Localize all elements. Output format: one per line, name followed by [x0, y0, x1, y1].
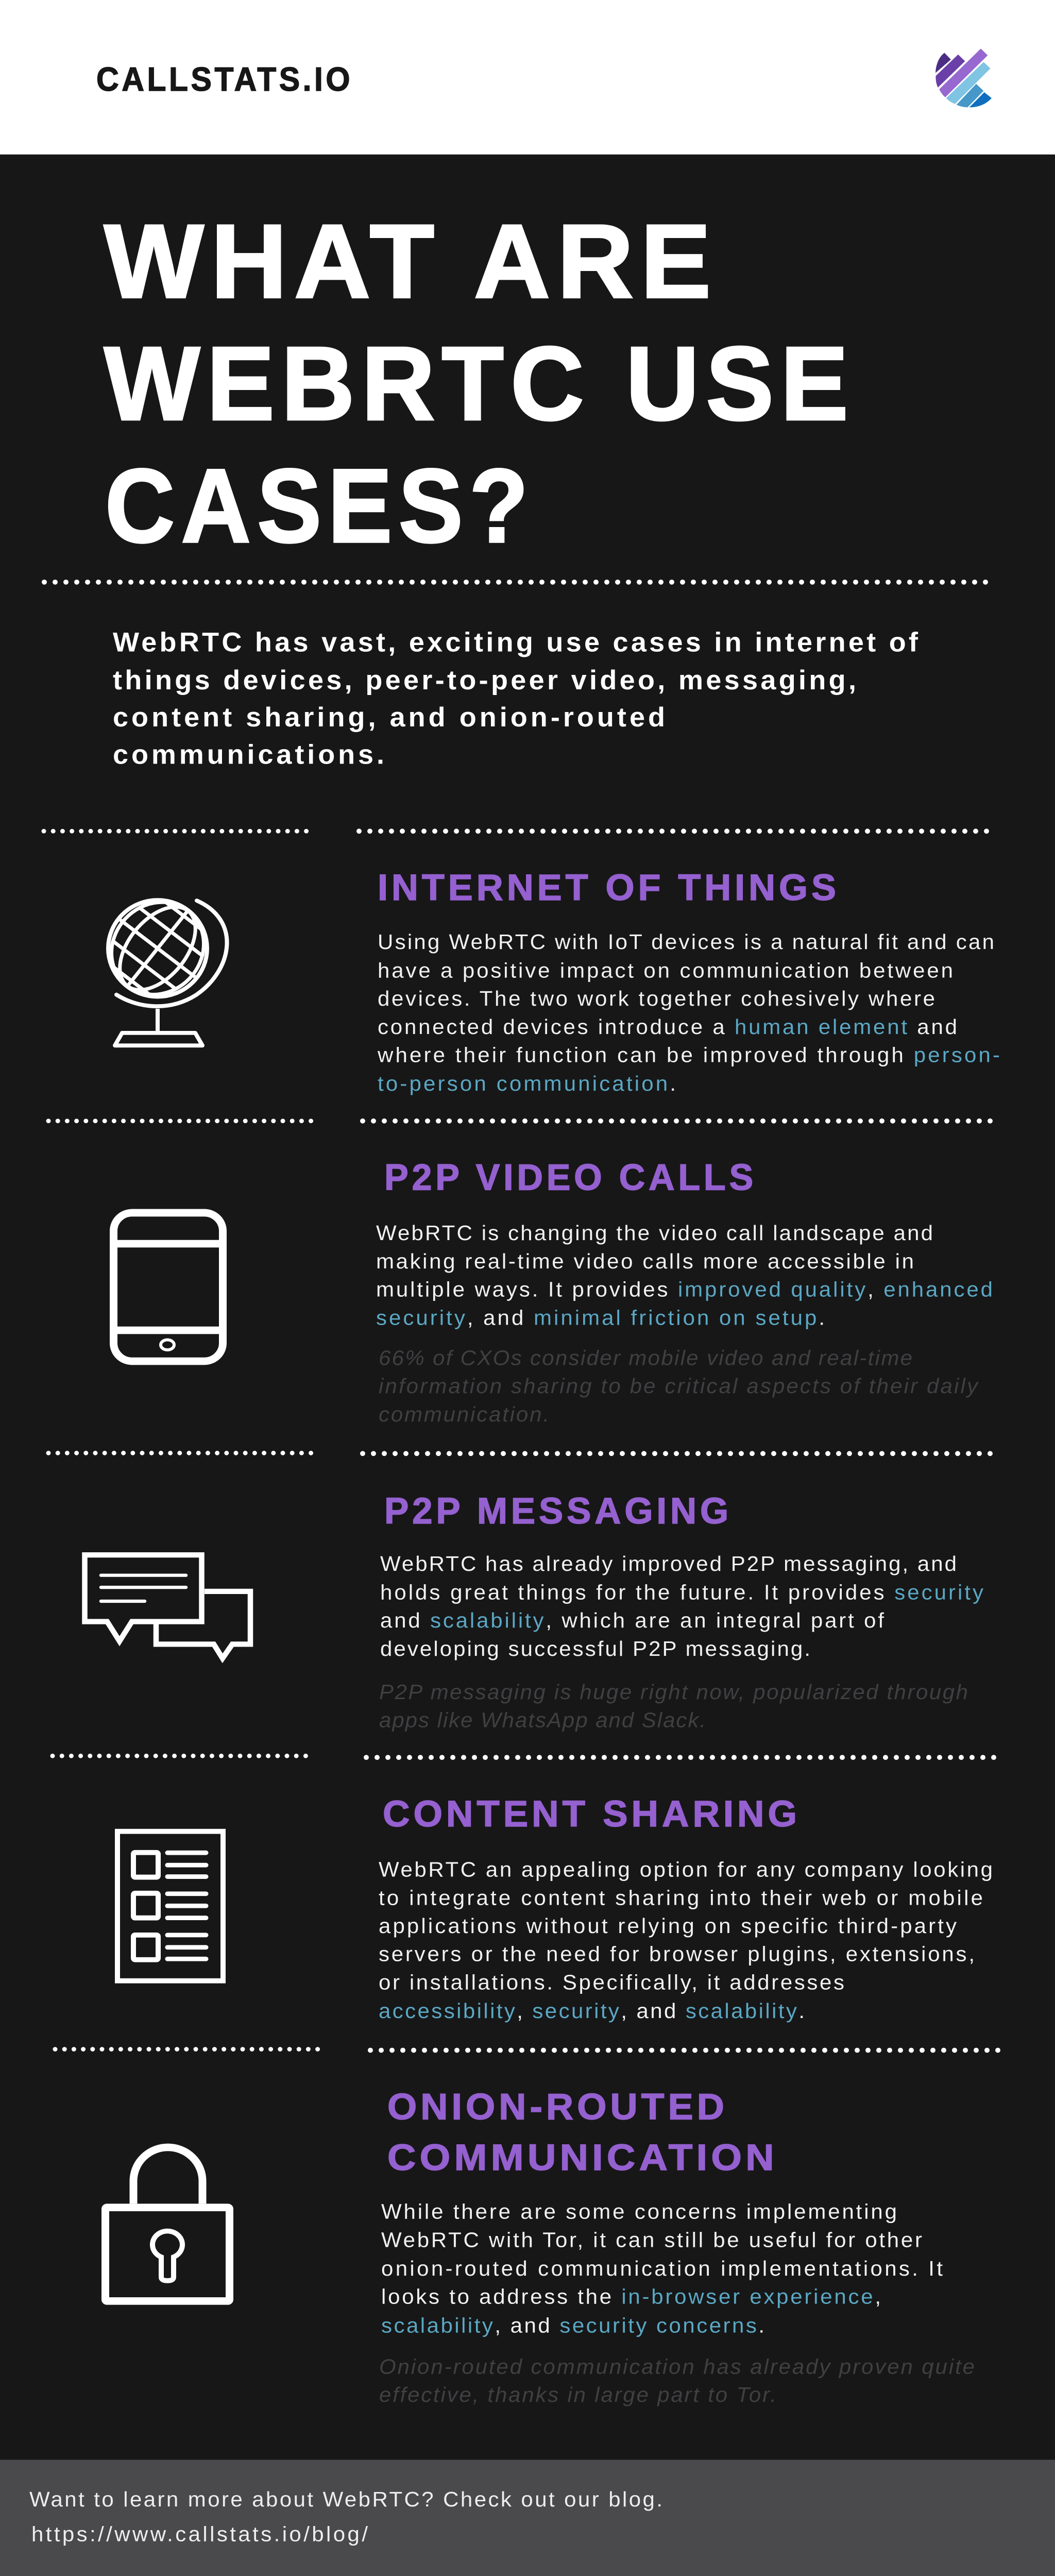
body text: to-person communication.: [378, 1072, 676, 1095]
body text: developing successful P2P messaging.: [380, 1636, 810, 1660]
title: CASES?: [105, 447, 535, 564]
body text: connected devices introduce a human element and: [378, 1014, 957, 1039]
body text: [376, 1221, 993, 1329]
body text: have a positive impact on communication between: [378, 958, 953, 982]
heading: COMMUNICATION: [387, 2138, 778, 2178]
panel: p2p video calls: [113, 1157, 993, 1426]
body text: applications without relying on specific third-party: [379, 1913, 957, 1938]
note: Onion-routed communication has already proven quite: [379, 2354, 975, 2378]
body text: WebRTC has already improved P2P messaging, and: [380, 1551, 957, 1575]
footer text: [29, 2487, 662, 2546]
note: [379, 1680, 968, 1732]
intro text: content sharing, and onion-routed: [113, 703, 665, 733]
body text: scalability, and security concerns.: [381, 2313, 764, 2337]
icon: tablet: [113, 1213, 223, 1361]
body text: security, and minimal friction on setup.: [376, 1306, 825, 1329]
intro text: things devices, peer-to-peer video, messaging,: [113, 665, 856, 696]
body text: [377, 929, 1000, 1095]
note: [379, 1346, 979, 1426]
body text: holds great things for the future. It provides security: [380, 1580, 983, 1604]
body text: servers or the need for browser plugins, extensions,: [379, 1942, 975, 1966]
intro text: WebRTC has vast, exciting use cases in internet of: [113, 628, 918, 658]
body text: [379, 1857, 993, 2023]
heading: INTERNET OF THINGS: [378, 868, 840, 908]
footer text: Want to learn more about WebRTC? Check out our blog.: [29, 2487, 662, 2511]
body text: making real-time video calls more accessible in: [376, 1249, 914, 1273]
intro text: communications.: [113, 740, 384, 770]
body text: devices. The two work together cohesively where: [378, 987, 935, 1010]
title: WHAT ARE: [104, 202, 718, 320]
body text: to integrate content sharing into their web or mobile: [379, 1886, 983, 1909]
icon: callstats logo: [935, 48, 992, 107]
body text: [381, 2199, 943, 2337]
body text: accessibility, security, and scalability.: [379, 1998, 805, 2023]
body text: looks to address the in-browser experience,: [381, 2284, 881, 2309]
icon: padlock: [105, 2147, 230, 2301]
panel: internet of things: [89, 868, 1000, 1095]
body text: WebRTC with Tor, it can still be useful for other: [381, 2228, 922, 2251]
body text: Using WebRTC with IoT devices is a natural fit and can: [378, 929, 994, 954]
panel: p2p messaging: [84, 1491, 983, 1732]
heading: P2P VIDEO CALLS: [384, 1157, 757, 1198]
icon: globe: [89, 881, 227, 1045]
note: P2P messaging is huge right now, popularized through: [379, 1680, 968, 1704]
body text: or installations. Specifically, it addresses: [379, 1970, 844, 1994]
body text: While there are some concerns implementing: [381, 2199, 897, 2224]
footer text: https://www.callstats.io/blog/: [31, 2522, 368, 2546]
panel: content sharing: [117, 1794, 993, 2023]
body text: WebRTC an appealing option for any company looking: [379, 1857, 993, 1881]
body text: multiple ways. It provides improved quality, enhanced: [376, 1277, 993, 1301]
brand name: CALLSTATS.IO: [96, 60, 353, 98]
icon: chat bubbles: [84, 1555, 250, 1658]
heading: [387, 2087, 778, 2178]
heading: P2P MESSAGING: [384, 1491, 732, 1532]
body text: where their function can be improved through person-: [377, 1043, 1000, 1066]
body text: onion-routed communication implementations. It: [381, 2256, 943, 2280]
icon: document list: [117, 1832, 223, 1981]
note: information sharing to be critical aspects of their daily: [379, 1374, 979, 1398]
heading: CONTENT SHARING: [383, 1794, 801, 1835]
note: effective, thanks in large part to Tor.: [379, 2383, 776, 2406]
note: [379, 2354, 975, 2406]
note: apps like WhatsApp and Slack.: [379, 1708, 706, 1732]
body text: and scalability, which are an integral part of: [380, 1608, 884, 1632]
body text: [380, 1551, 983, 1660]
heading: ONION-ROUTED: [387, 2087, 728, 2127]
intro text: [113, 628, 918, 770]
note: communication.: [379, 1402, 549, 1426]
body text: WebRTC is changing the video call landscape and: [376, 1221, 933, 1245]
title: WEBRTC USE: [104, 325, 855, 442]
title: [104, 202, 855, 564]
header band: [0, 0, 1055, 155]
note: 66% of CXOs consider mobile video and real-time: [379, 1346, 912, 1369]
footer: [0, 2460, 1055, 2576]
panel: onion-routed communication: [105, 2087, 975, 2406]
